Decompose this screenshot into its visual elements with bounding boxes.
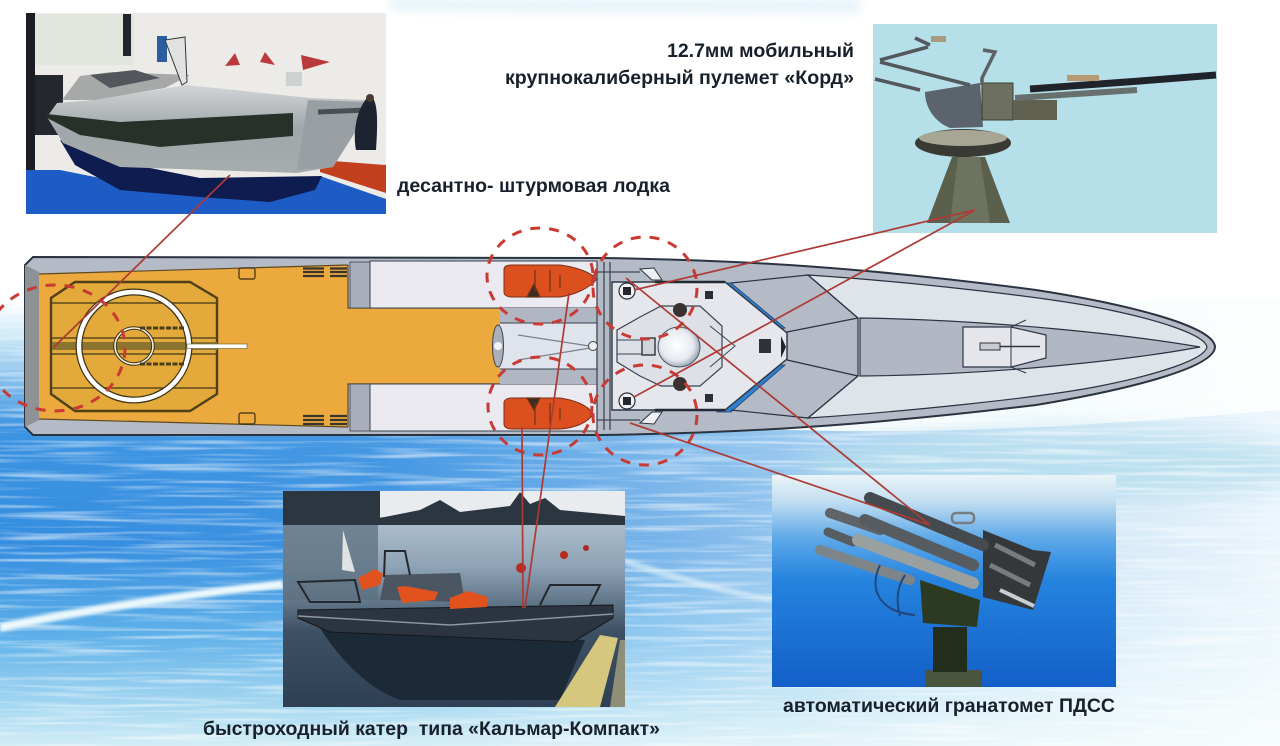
rescue boat top (504, 265, 597, 297)
label: speed boat: быстроходный катер типа «Кальмар-Компакт» (203, 719, 660, 740)
label: Kord machine gun: 12.7мм мобильный (667, 41, 854, 62)
superstructure (612, 268, 787, 424)
deck fittings (239, 268, 347, 424)
transverse frame (597, 262, 640, 430)
orange deck (39, 265, 500, 427)
photo: PDSS grenade launcher (772, 475, 1116, 687)
red dashed callout circles (0, 228, 697, 465)
bow gun turret (963, 320, 1046, 373)
boat details (527, 270, 560, 425)
ship top-down plan (25, 257, 1215, 435)
label: Kord machine gun (505, 41, 854, 89)
photo: speed boat Kalmar-Compact (283, 491, 625, 707)
bow blue strips (717, 283, 785, 412)
label: Kord machine gun: крупнокалиберный пулемет «Корд» (505, 68, 854, 89)
bow light deck (808, 275, 1207, 418)
photo: Kord machine gun (873, 24, 1217, 233)
red leader lines (53, 175, 975, 608)
side bays (350, 261, 597, 431)
hull outline (25, 257, 1215, 435)
helipad (51, 282, 247, 411)
label: assault boat: десантно- штурмовая лодка (397, 176, 670, 197)
rescue boat bottom (504, 398, 593, 429)
photo: assault boat (26, 13, 386, 214)
label: PDSS grenade launcher: автоматический гранатомет ПДСС (783, 696, 1115, 717)
bow grey centre (860, 318, 1200, 376)
grey wedge outlines (731, 275, 858, 418)
stern grey band (25, 265, 39, 427)
